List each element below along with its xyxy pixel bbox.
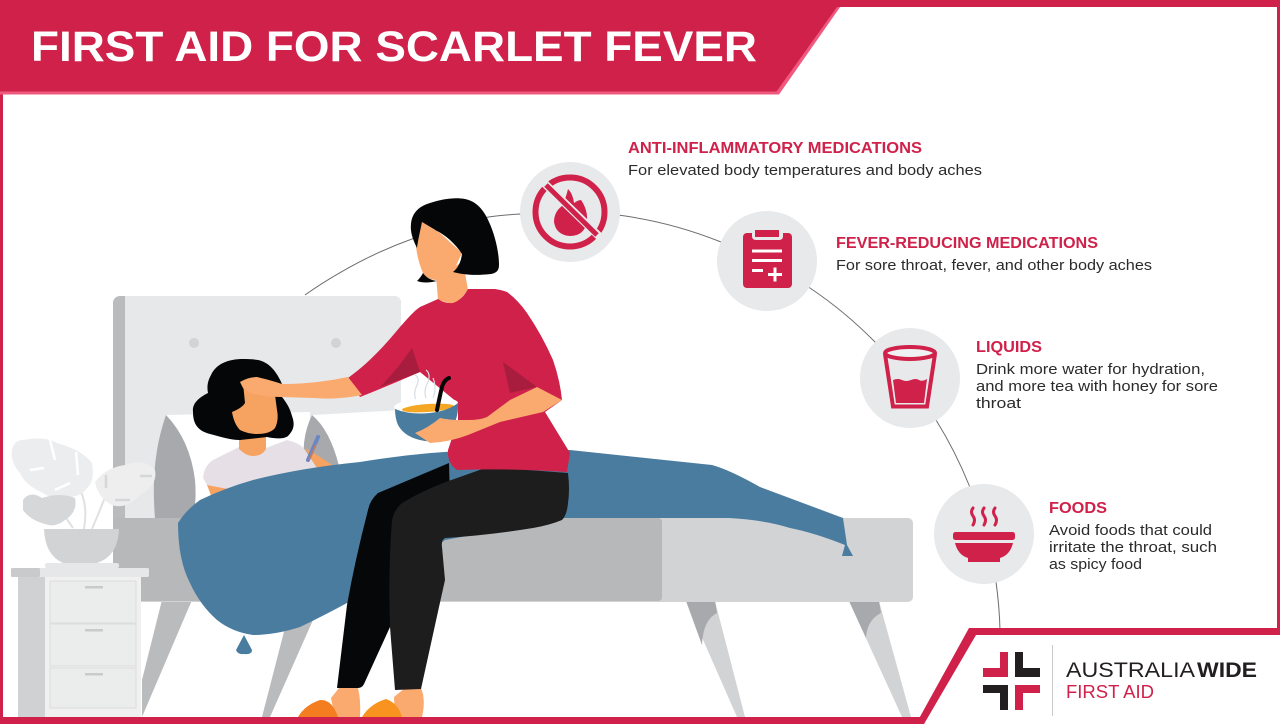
connecting arc [305,214,1000,630]
feet [331,688,424,717]
title banner [0,0,1280,94]
illustration: sick child [193,359,335,498]
icon: hot bowl [934,484,1034,584]
description: irritate the throat, such [1049,539,1217,556]
thermometer [308,437,318,460]
heading: FOODS [1049,500,1107,517]
description [976,361,1218,412]
icon: clipboard [717,211,817,311]
title: FIRST AID FOR SCARLET FEVER [31,23,757,71]
trousers [337,463,569,690]
pillows [154,410,403,532]
description [1049,522,1217,573]
description: Avoid foods that could [1049,522,1212,539]
slippers [298,699,402,717]
logo wordmark: FIRST AID [1066,682,1154,702]
sleeve shadow [380,348,420,387]
forearm and hand holding bowl [415,387,562,443]
description: For sore throat, fever, and other body aches [836,257,1152,274]
heading: ANTI-INFLAMMATORY MEDICATIONS [628,140,922,157]
illustration: caregiver [240,198,570,717]
footer logo panel [916,628,1280,724]
child face [232,383,278,434]
child arms [207,485,233,498]
headboard [113,296,401,531]
heading: LIQUIDS [976,339,1042,356]
shirt [348,289,570,472]
bed legs [142,600,911,717]
description: as spicy food [1049,556,1142,573]
icon: crossed-out flame drop [520,162,620,262]
nightstand and plant [11,439,155,717]
heading: FEVER-REDUCING MEDICATIONS [836,235,1098,252]
spoon [437,378,449,410]
description: and more tea with honey for sore [976,378,1218,395]
item: liquids [860,328,1218,428]
item: anti-inflammatory medications [520,140,982,262]
child hair [193,359,294,440]
illustration: bed and nightstand [11,296,913,717]
shirt fold [503,362,537,393]
mattress [113,518,913,602]
neck [436,262,468,305]
item: foods [934,484,1217,584]
face [416,222,462,280]
logo wordmark: AUSTRALIA [1066,659,1195,682]
description: For elevated body temperatures and body aches [628,162,982,179]
child neck [239,428,266,456]
child t-shirt [203,440,317,490]
logo mark [983,652,1040,710]
logo wordmark: WIDE [1197,659,1257,682]
icon: glass of water [860,328,960,428]
blanket tassel [236,635,252,654]
arm reaching to child [240,377,362,399]
item: fever-reducing medications [717,211,1152,311]
steam [415,370,435,405]
hair [411,198,499,282]
description: throat [976,395,1022,412]
logo wordmark [1066,659,1257,702]
blanket [178,450,853,654]
description: Drink more water for hydration, [976,361,1205,378]
soup bowl [394,370,458,441]
